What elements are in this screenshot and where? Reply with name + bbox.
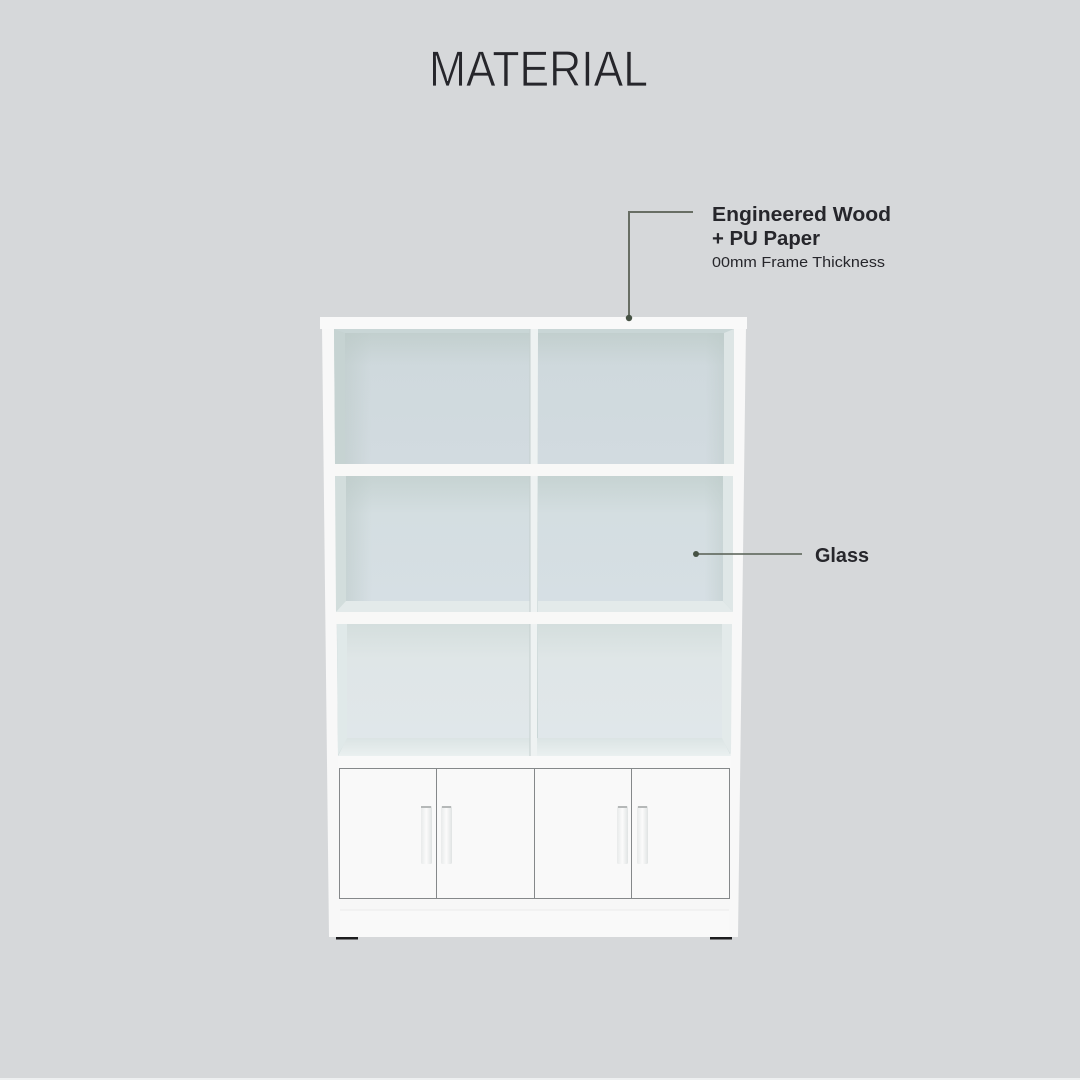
door 3 [535, 769, 631, 898]
callout: engineered wood text: Engineered Wood [712, 204, 891, 226]
door 2 [437, 769, 534, 898]
callout: engineered wood text [712, 204, 891, 271]
callout: engineered wood text: 00mm Frame Thickness [712, 254, 885, 271]
cabinet feet [336, 937, 732, 940]
upper left compartment [334, 329, 530, 464]
title: MATERIAL [429, 41, 648, 97]
handle 4 [637, 806, 648, 864]
central divider [530, 329, 538, 756]
middle shelf [336, 612, 733, 624]
callout: glass label: Glass [815, 545, 869, 567]
cabinet doors [339, 768, 730, 899]
plinth [340, 899, 730, 937]
upper shelf [335, 464, 734, 476]
bottom shelf surface [338, 738, 731, 756]
handle 2 [441, 806, 452, 864]
middle left compartment [335, 476, 530, 612]
callout: engineered wood leader line [626, 212, 693, 321]
upper right compartment [538, 329, 734, 464]
callout: glass leader line [693, 551, 802, 557]
door 1 [340, 769, 436, 898]
handle 3 [617, 806, 628, 864]
lower shelf [338, 756, 731, 768]
callout: engineered wood text: + PU Paper [712, 228, 820, 250]
open shelves interior [334, 329, 734, 756]
middle right compartment (glass) [538, 476, 733, 612]
door 4 [632, 769, 729, 898]
lower left compartment [337, 624, 530, 755]
bookshelf cabinet [320, 317, 747, 940]
top board [320, 317, 747, 329]
lower right compartment [538, 624, 732, 755]
cabinet body [322, 326, 746, 937]
handle 1 [421, 806, 432, 864]
